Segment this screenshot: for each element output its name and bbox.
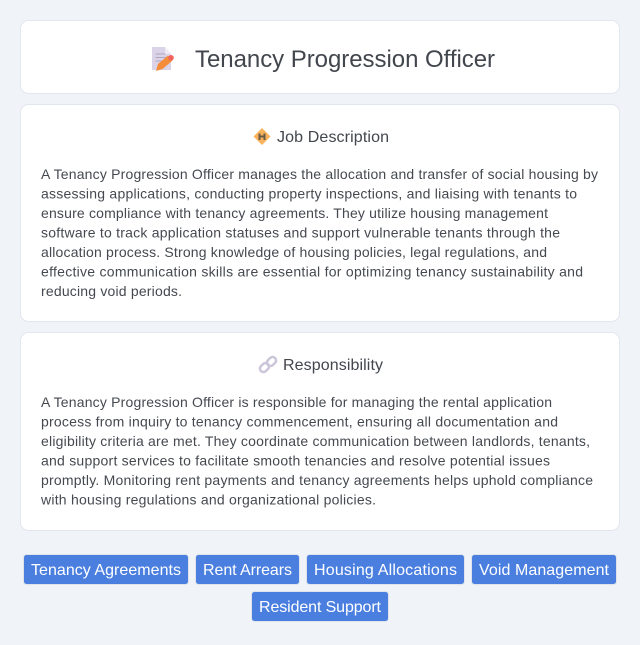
tag: Rent Arrears <box>196 554 300 584</box>
icon: chain link <box>258 355 278 374</box>
text block: job description: software to track application statuses and support vulnerable tenants through the <box>41 224 560 240</box>
icon: document with pencil <box>152 47 174 71</box>
icon: orange diamond <box>254 128 270 145</box>
heading: job description: Job Description <box>277 129 389 146</box>
title: Tenancy Progression Officer <box>195 46 495 73</box>
text block: job description: ensure compliance with tenancy agreements. They utilize housing management <box>41 205 548 221</box>
text block: job description <box>41 166 598 299</box>
text block: responsibility: eligibility criteria are met. They coordinate communication between landlords, tenants, <box>41 433 590 449</box>
tag: Void Management: Void Management <box>479 562 610 579</box>
tag: Resident Support: Resident Support <box>259 599 382 616</box>
text block: job description: allocation process. Strong knowledge of housing policies, legal regulations, and <box>41 244 547 260</box>
text block: responsibility: and support services to facilitate smooth tenancies and resolve potential issues <box>41 452 550 468</box>
panel: job description <box>20 104 620 322</box>
text block: responsibility <box>40 394 593 508</box>
tag: Void Management <box>472 554 616 584</box>
text block: job description: A Tenancy Progression Officer manages the allocation and transfer of social housing by <box>41 166 598 182</box>
text block: responsibility: promptly. Monitoring rent payments and tenancy agreements helps uphold compliance <box>41 472 593 488</box>
text block: job description: reducing void periods. <box>41 283 182 299</box>
panel: title card <box>20 20 620 94</box>
text block: job description: effective communication skills are essential for optimizing tenancy sustainability and <box>41 264 583 280</box>
text block: responsibility: process from inquiry to tenancy commencement, ensuring all documentation and <box>41 414 558 430</box>
heading: responsibility: Responsibility <box>283 357 383 374</box>
panel: responsibility <box>20 332 620 530</box>
text block: job description: assessing applications, conducting property inspections, and liaising with tenants to <box>41 186 577 202</box>
tag: Tenancy Agreements: Tenancy Agreements <box>31 562 181 579</box>
text block: responsibility: with housing regulations and organizational policies. <box>40 492 376 508</box>
tag: Resident Support <box>252 592 388 622</box>
text block: responsibility: A Tenancy Progression Officer is responsible for managing the rental application <box>41 394 552 410</box>
tag: Tenancy Agreements <box>24 554 188 584</box>
tag: Housing Allocations: Housing Allocations <box>314 562 457 579</box>
tag: Rent Arrears: Rent Arrears <box>203 562 292 579</box>
tag: Housing Allocations <box>306 554 464 584</box>
